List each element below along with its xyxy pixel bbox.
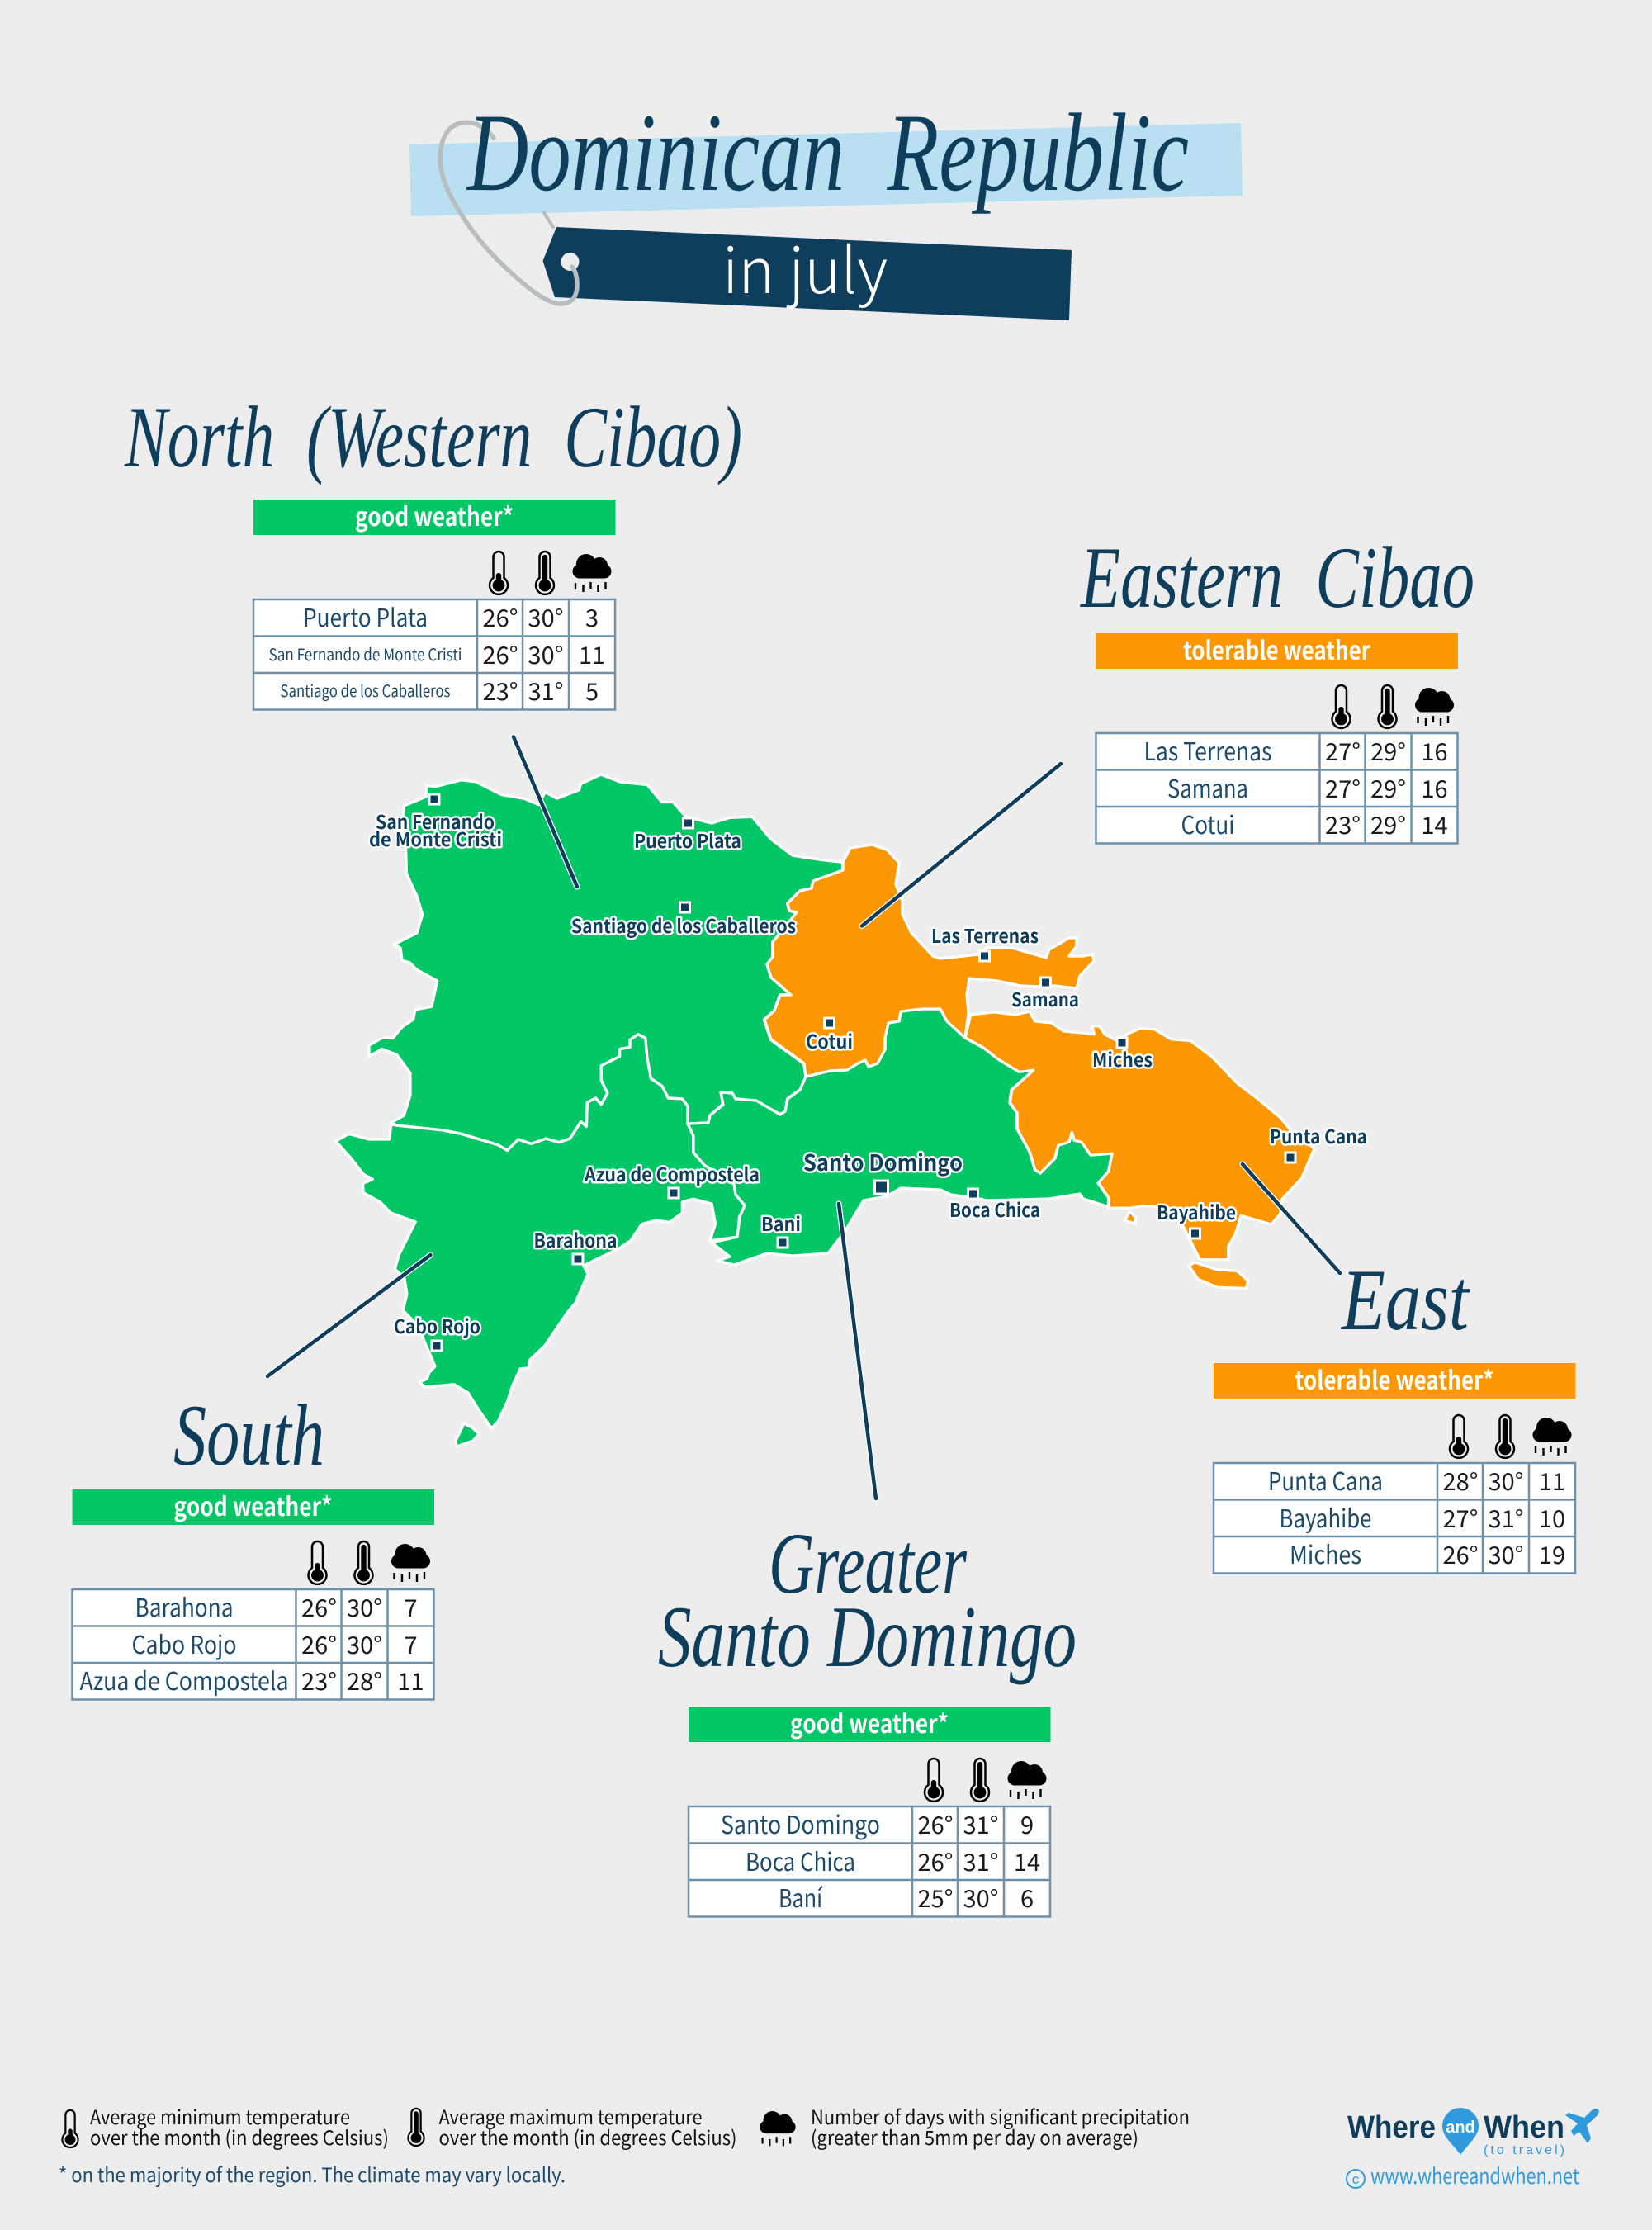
- table: Samana: [1167, 769, 1248, 805]
- panel: north: [253, 496, 616, 710]
- city: San Fernando de Monte Cristi: San Fernando: [376, 807, 495, 835]
- panel: greater santo domingo: [689, 1703, 1050, 1917]
- table: 27°: [1325, 770, 1361, 805]
- column icons: [490, 552, 611, 594]
- table: 30°: [347, 1589, 382, 1624]
- city: San Fernando de Monte Cristi: [369, 794, 502, 852]
- city: Cabo Rojo: Cabo Rojo: [394, 1311, 480, 1339]
- table: Las Terrenas: [1144, 731, 1271, 768]
- table: [73, 1588, 434, 1699]
- callout line: greater santo domingo: [839, 1204, 876, 1499]
- callout line: east: [1243, 1164, 1340, 1273]
- table: Santiago de los Caballeros: [281, 678, 451, 702]
- table: Azua de Compostela: [79, 1661, 289, 1697]
- table: 30°: [347, 1626, 382, 1661]
- city: San Fernando de Monte Cristi: de Monte Cristi: [369, 824, 502, 852]
- footnote: * on the majority of the region. The climate may vary locally.: [59, 2159, 566, 2188]
- city: Santo Domingo: Santo Domingo: [803, 1145, 963, 1177]
- heading: South: South: [173, 1387, 324, 1484]
- logo wordmark: [1347, 2110, 1564, 2145]
- region: east: [965, 1011, 1314, 1260]
- region: eastern cibao: [764, 845, 1094, 1077]
- legend: precipitation: (greater than 5mm per day on average): [811, 2122, 1138, 2151]
- region: south: [336, 1035, 745, 1428]
- city: Cotui: Cotui: [806, 1026, 853, 1054]
- callout line: south: [267, 1255, 431, 1376]
- table: 26°: [301, 1589, 337, 1624]
- table: 27°: [1443, 1500, 1478, 1535]
- table: Miches: [1290, 1535, 1361, 1571]
- table: 11: [397, 1663, 424, 1697]
- table: 30°: [963, 1880, 998, 1915]
- table: 30°: [528, 599, 563, 634]
- region: north western cibao: [369, 774, 843, 1150]
- tag string stub: [544, 213, 553, 227]
- region: greater santo domingo: [688, 1009, 1112, 1265]
- table: 29°: [1370, 733, 1406, 768]
- table: 26°: [918, 1844, 953, 1878]
- city: Bayahibe: [1157, 1197, 1236, 1238]
- table: 7: [404, 1626, 418, 1661]
- heading: Greater Santo Domingo: Santo Domingo: [658, 1588, 1077, 1685]
- table: 11: [1539, 1463, 1565, 1498]
- city: Boca Chica: Boca Chica: [949, 1195, 1040, 1223]
- city: Samana: Samana: [1011, 984, 1079, 1012]
- legend: precipitation: [760, 2101, 1190, 2151]
- column icons: [1450, 1415, 1572, 1458]
- weather bar: good weather*: [173, 1486, 332, 1523]
- city: Miches: Miches: [1092, 1044, 1153, 1072]
- table: [253, 598, 615, 710]
- heading: Greater Santo Domingo: [658, 1515, 1077, 1685]
- heading: Eastern Cibao: Eastern Cibao: [1080, 529, 1474, 626]
- legend: precipitation: Number of days with significant precipitation: [811, 2101, 1190, 2130]
- table: Boca Chica: [746, 1842, 855, 1878]
- panel: east: [1214, 1360, 1575, 1574]
- city: Bani: Bani: [761, 1209, 801, 1237]
- table: 7: [404, 1589, 418, 1624]
- logo wordmark: When: [1484, 2110, 1564, 2145]
- table: Cotui: [1181, 805, 1235, 841]
- heading: North (Western Cibao): North (Western Cibao): [124, 389, 742, 485]
- city: Bayahibe: Bayahibe: [1157, 1197, 1236, 1225]
- table: 10: [1539, 1500, 1565, 1535]
- table: 14: [1421, 807, 1448, 841]
- table: 14: [1014, 1844, 1040, 1878]
- region: south island: [456, 1423, 479, 1446]
- table: 26°: [301, 1626, 337, 1661]
- title banner: [409, 92, 1243, 320]
- table: [1214, 1461, 1575, 1574]
- city: Bani: [761, 1209, 801, 1248]
- silver ring: [440, 122, 577, 304]
- weather bar: [73, 1486, 434, 1525]
- table: 31°: [528, 673, 563, 708]
- table: [689, 1805, 1050, 1917]
- table: 28°: [1443, 1463, 1478, 1498]
- copyright icon: c: [1352, 2171, 1360, 2187]
- heading: Greater Santo Domingo: Greater: [769, 1515, 968, 1612]
- city: Cabo Rojo: [394, 1311, 480, 1351]
- website: www.whereandwhen.net: [1370, 2160, 1579, 2190]
- table: 5: [585, 673, 599, 708]
- city: Azua de Compostela: [584, 1159, 760, 1198]
- city: Las Terrenas: Las Terrenas: [931, 921, 1039, 949]
- weather bar: tolerable weather: [1183, 630, 1370, 667]
- table: Cabo Rojo: [132, 1625, 236, 1661]
- table: Punta Cana: [1268, 1461, 1383, 1498]
- weather bar: [1214, 1360, 1575, 1399]
- city: Las Terrenas: [931, 921, 1039, 961]
- logo pin: and: [1446, 2119, 1475, 2137]
- callout line: eastern cibao: [862, 764, 1061, 926]
- legend: minimum temperature: [62, 2101, 389, 2151]
- legend: minimum temperature: Average minimum temperature: [90, 2101, 350, 2130]
- weather bar: tolerable weather*: [1295, 1360, 1494, 1397]
- subtitle: in july: [722, 220, 888, 311]
- table: 29°: [1370, 770, 1406, 805]
- legend: minimum temperature: over the month (in degrees Celsius): [90, 2122, 389, 2151]
- tag hole: [561, 253, 580, 271]
- city: Santo Domingo: [803, 1145, 963, 1194]
- city markers and labels: [369, 794, 1367, 1351]
- table: 28°: [347, 1663, 382, 1697]
- table: 11: [579, 637, 605, 671]
- table: 23°: [301, 1663, 337, 1697]
- weather bar: good weather*: [355, 496, 514, 533]
- heading: East: East: [1340, 1252, 1470, 1348]
- table: Baní: [779, 1878, 823, 1915]
- table: Bayahibe: [1280, 1499, 1372, 1535]
- column icons: [1332, 685, 1454, 728]
- logo tagline: (to travel): [1484, 2143, 1564, 2157]
- table: 31°: [963, 1844, 998, 1878]
- copyright icon: [1347, 2170, 1365, 2188]
- tag shape: [543, 227, 1072, 320]
- table: 23°: [483, 673, 518, 708]
- table: 27°: [1325, 733, 1361, 768]
- legend: [59, 2101, 1190, 2188]
- legend: maximum temperature: Average maximum temperature: [439, 2101, 702, 2130]
- table: 16: [1421, 733, 1448, 768]
- weather bar: [689, 1703, 1050, 1742]
- region: east islet: [1124, 1211, 1135, 1224]
- table: 31°: [1489, 1500, 1523, 1535]
- legend: maximum temperature: over the month (in degrees Celsius): [439, 2122, 736, 2151]
- city: Punta Cana: [1270, 1121, 1367, 1162]
- column icons: [925, 1759, 1047, 1802]
- callout line: north: [514, 736, 577, 887]
- table: San Fernando de Monte Cristi: [269, 642, 462, 665]
- logo plane: [1565, 2109, 1599, 2143]
- city: Punta Cana: Punta Cana: [1270, 1121, 1367, 1149]
- table: [1096, 731, 1458, 844]
- legend: maximum temperature: [408, 2101, 736, 2151]
- table: 31°: [963, 1806, 998, 1841]
- weather bar: [1096, 630, 1458, 669]
- city: Barahona: [533, 1225, 618, 1264]
- table: 26°: [918, 1806, 953, 1841]
- title script text: Dominican Republic: [466, 92, 1189, 215]
- table: Puerto Plata: [303, 598, 428, 634]
- logo wordmark: Where: [1347, 2110, 1436, 2145]
- table: 3: [585, 599, 599, 634]
- weather bar: [253, 496, 616, 535]
- table: Santo Domingo: [721, 1805, 880, 1841]
- table: 30°: [528, 637, 563, 671]
- weather bar: good weather*: [790, 1703, 949, 1740]
- city: Puerto Plata: Puerto Plata: [634, 826, 741, 854]
- table: 16: [1421, 770, 1448, 805]
- table: 19: [1539, 1536, 1565, 1571]
- table: 30°: [1489, 1463, 1523, 1498]
- table: 26°: [483, 599, 518, 634]
- map: [336, 774, 1314, 1446]
- table: 23°: [1325, 807, 1361, 841]
- table: 26°: [483, 637, 518, 671]
- panel: south: [73, 1486, 434, 1699]
- city: Barahona: Barahona: [533, 1225, 618, 1253]
- table: 30°: [1489, 1536, 1523, 1571]
- logo: [1347, 2108, 1599, 2190]
- table: Barahona: [135, 1588, 233, 1624]
- panel: eastern cibao: [1096, 630, 1458, 844]
- city: Azua de Compostela: Azua de Compostela: [584, 1159, 760, 1187]
- city: Santiago de los Caballeros: Santiago de los Caballeros: [571, 911, 796, 939]
- table: 6: [1020, 1880, 1034, 1915]
- column icons: [309, 1541, 430, 1584]
- table: 25°: [918, 1880, 953, 1915]
- table: 26°: [1443, 1536, 1478, 1571]
- title light blue band: [409, 123, 1243, 216]
- region: east island saona: [1189, 1262, 1248, 1288]
- table: 9: [1020, 1806, 1034, 1841]
- table: 29°: [1370, 807, 1406, 841]
- logo pin: [1442, 2108, 1479, 2155]
